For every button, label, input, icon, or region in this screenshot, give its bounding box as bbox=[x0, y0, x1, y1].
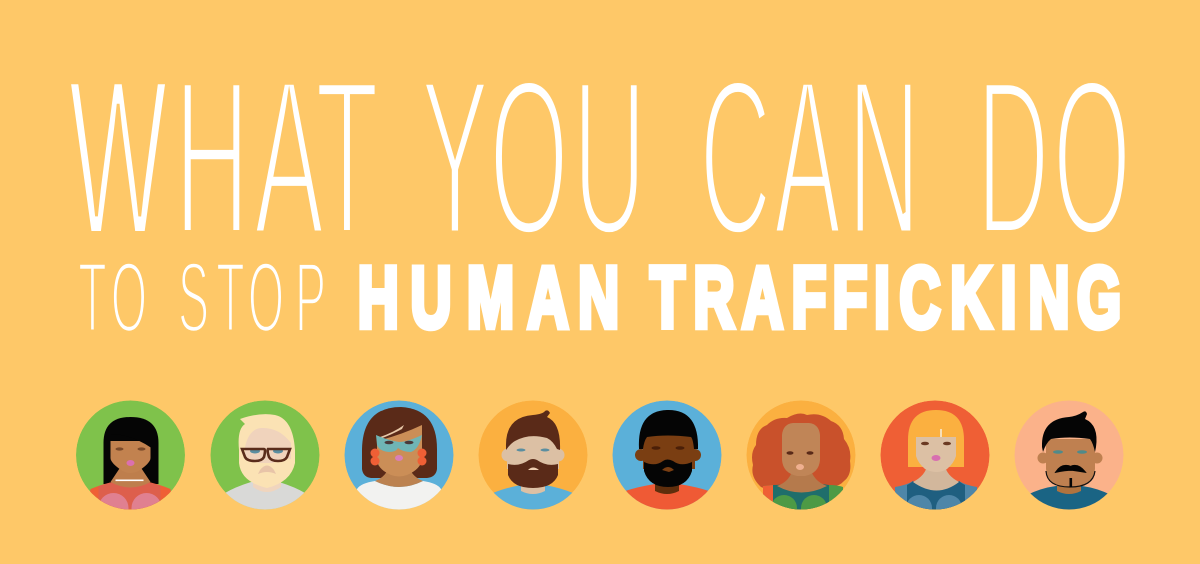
avatar: woman with curly red hair bbox=[746, 400, 856, 521]
title: what you can do: YOU bbox=[421, 34, 646, 282]
subtitle: to stop human trafficking: HUMAN bbox=[358, 250, 619, 346]
avatar: man with brown hair and beard bbox=[478, 400, 588, 515]
avatar: woman with long black hair bbox=[76, 400, 185, 510]
subtitle: to stop human trafficking: TRAFFICKING bbox=[650, 250, 1121, 346]
avatar: older man with blond hair and glasses bbox=[210, 400, 320, 515]
subtitle: to stop human trafficking bbox=[78, 243, 1121, 353]
title: what you can do: WHAT bbox=[69, 33, 379, 281]
avatar: woman with blond bob hair bbox=[880, 400, 990, 521]
title: what you can do: CAN bbox=[699, 34, 920, 282]
avatar: woman with teal mask and orange earrings bbox=[344, 400, 454, 515]
title: what you can do: DO bbox=[977, 33, 1131, 282]
title: what you can do bbox=[69, 33, 1131, 282]
subtitle: to stop human trafficking: STOP bbox=[178, 243, 326, 353]
avatar: man with black hair and moustache bbox=[1014, 400, 1124, 515]
avatar: man with black beard and orange shirt bbox=[612, 400, 722, 515]
subtitle: to stop human trafficking: TO bbox=[78, 243, 147, 353]
